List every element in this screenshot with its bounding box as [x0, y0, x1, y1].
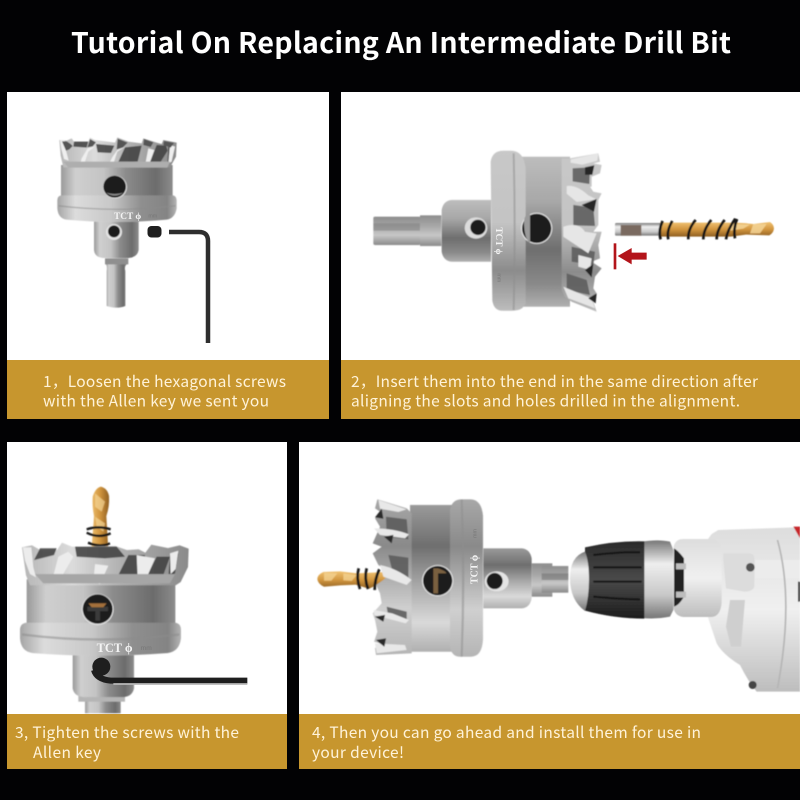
illustration: hole saw side view: mm: [495, 273, 501, 283]
illustration: hole saw mounted in drill: mm: [473, 529, 479, 538]
illustration: hole saw with screw and Allen key: mm: [148, 214, 158, 220]
caption bar 4: 4, Then you can go ahead and install them for use in: [312, 721, 701, 743]
illustration: hole saw side view: [373, 151, 602, 312]
arrow: insertion direction: [614, 243, 647, 269]
engraved label: TCT ϕ: [470, 555, 481, 584]
illustration: hole saw mounted in drill: [317, 499, 568, 657]
caption bar 3: Allen key: [33, 741, 101, 763]
panel: step 3: [7, 442, 287, 769]
illustration: hole saw with drill bit and Allen key: mm: [141, 645, 152, 652]
caption bar 3: 3, Tighten the screws with the: [15, 721, 239, 743]
panel: step 4: [299, 442, 800, 769]
engraved label: TCT ϕ: [493, 227, 503, 255]
caption bar 2: 2，Insert them into the end in the same direction after: [351, 370, 759, 392]
caption bar 2: [341, 360, 800, 419]
caption bar 4: your device!: [312, 741, 404, 763]
caption bar 2: aligning the slots and holes drilled in the alignment.: [351, 390, 740, 412]
panel: step 2: [341, 92, 800, 419]
caption bar 1: 1，Loosen the hexagonal screws: [43, 370, 286, 392]
caption bar 4: [299, 714, 800, 769]
icon: drill bit: [317, 568, 392, 590]
illustration: hole saw with screw and Allen key: [57, 137, 177, 308]
caption bar 1: [7, 360, 329, 419]
caption bar 1: with the Allen key we sent you: [43, 390, 269, 412]
engraved label: TCT ϕ: [114, 212, 141, 222]
caption bar 3: [7, 714, 287, 769]
engraved label: TCT ϕ: [97, 641, 133, 655]
icon: Allen key: [92, 658, 247, 684]
title: Tutorial On Replacing An Intermediate Drill Bit: [71, 21, 731, 62]
icon: power drill: [570, 527, 800, 692]
illustration: hole saw with drill bit and Allen key: [20, 487, 247, 713]
icon: drill bit: [87, 487, 111, 563]
icon: step drill bit with spring: [615, 219, 774, 239]
icon: Allen key: [169, 232, 208, 343]
icon: hex screw: [148, 226, 162, 238]
panel: step 1: [7, 92, 329, 419]
